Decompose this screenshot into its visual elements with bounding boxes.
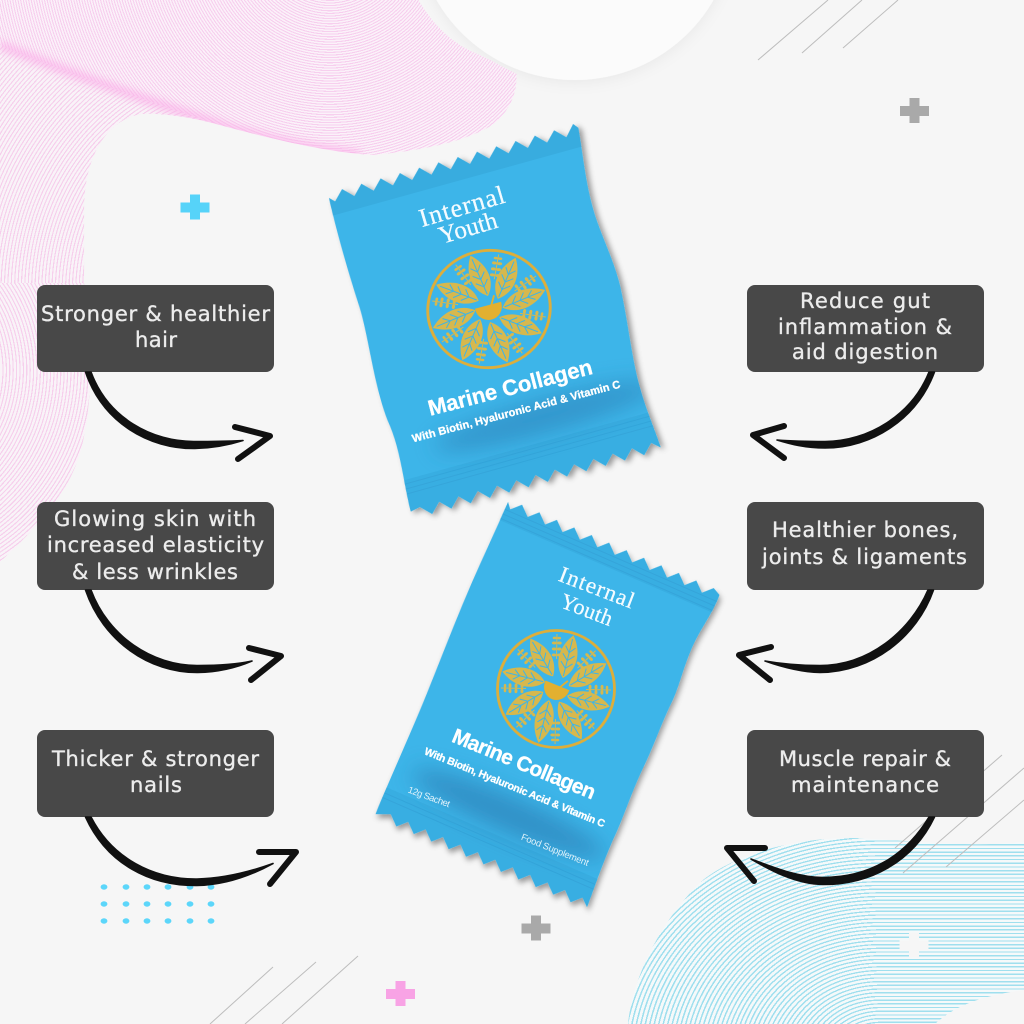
- callout: gut: Reduce gut: [800, 289, 930, 313]
- sachet brand: top product: Internal: [416, 180, 508, 233]
- callout: skin: Glowing skin with: [54, 507, 256, 531]
- callout: gut: aid digestion: [792, 340, 938, 364]
- diagonal lines bottom left: [210, 956, 358, 1024]
- arrow: nails: [86, 817, 296, 886]
- diagonal lines bottom right: [895, 755, 1024, 873]
- sachet brand: top product: Youth: [436, 207, 501, 250]
- callout: nails: nails: [130, 773, 182, 797]
- callout: hair: hair: [135, 328, 177, 352]
- callout: nails: [37, 730, 274, 817]
- callout: hair: Stronger & healthier: [41, 302, 270, 326]
- callout: muscle: [747, 730, 984, 817]
- sachet brand: bottom product: Youth: [557, 588, 617, 631]
- blue wave line pattern: [620, 830, 1024, 1024]
- icon: grey plus top right: [900, 98, 929, 123]
- sachet subtitle: top product: With Biotin, Hyaluronic Acid & Vitamin C: [411, 379, 622, 445]
- sachet: top product: [328, 124, 666, 518]
- sachet logo: bottom product: [480, 613, 632, 765]
- diagonal lines top right: [758, 0, 898, 60]
- icon: pink plus: [386, 981, 415, 1006]
- callout: muscle: maintenance: [791, 773, 939, 797]
- callout: nails: Thicker & stronger: [51, 747, 259, 771]
- icon: grey plus bottom centre: [522, 916, 550, 940]
- dot grid: [101, 884, 214, 924]
- sachet: bottom product: [375, 502, 724, 912]
- callout: skin: increased elasticity: [47, 533, 264, 557]
- sachet weight: 12g Sachet: [406, 785, 452, 810]
- sachet logo: top product: [415, 237, 563, 381]
- sachet subtitle: bottom product: With Biotin, Hyaluronic Acid & Vitamin C: [423, 746, 607, 830]
- pink wave line pattern: [0, 0, 530, 573]
- callout: hair: [37, 285, 274, 372]
- arrow: hair: [86, 372, 270, 459]
- callout: bones: [747, 502, 984, 590]
- icon: blue plus: [180, 194, 210, 220]
- sachet brand: bottom product: Internal: [555, 562, 638, 613]
- sachet food supplement label: Food Supplement: [519, 832, 591, 869]
- background circle: [415, 0, 735, 80]
- callout: gut: inflammation &: [778, 315, 952, 339]
- arrow: skin: [86, 590, 281, 680]
- callout: muscle: Muscle repair &: [779, 747, 951, 771]
- arrow: bones: [739, 590, 934, 680]
- icon: white plus: [900, 932, 928, 958]
- callout: bones: Healthier bones,: [772, 518, 958, 542]
- arrow: muscle: [727, 817, 934, 884]
- sachet title: top product: Marine Collagen: [425, 354, 595, 421]
- arrow: gut: [753, 372, 934, 458]
- callout: bones: joints & ligaments: [761, 545, 967, 569]
- callout: skin: & less wrinkles: [72, 560, 238, 584]
- sachet title: bottom product: Marine Collagen: [449, 725, 599, 804]
- callout: gut: [747, 285, 984, 372]
- callout: skin: [37, 502, 274, 590]
